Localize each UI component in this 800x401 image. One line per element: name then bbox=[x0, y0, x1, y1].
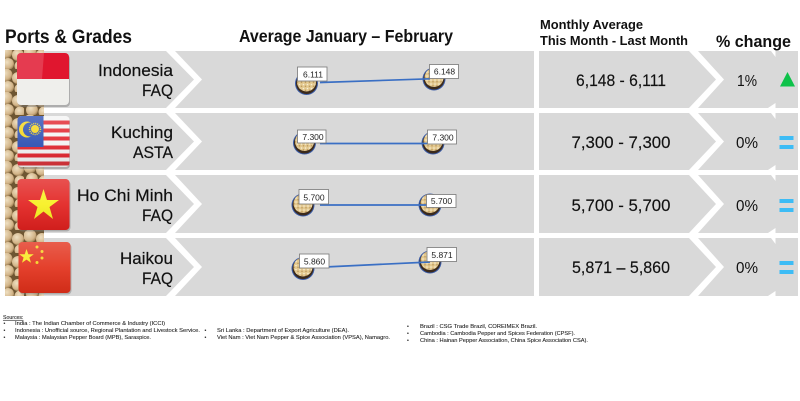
text: ho chi minh faq bbox=[77, 186, 173, 225]
title: monthly average: This Month - Last Month bbox=[540, 33, 688, 48]
text block: sources middle: Viet Nam : Viet Nam Pepper & Spice Association (VPSA), Namagro. bbox=[217, 335, 390, 341]
text: monthly values row 4: 5,871 – 5,860 bbox=[572, 258, 670, 277]
text block: sources right: Brazil : CSG Trade Brazil, COREIMEX Brazil. bbox=[420, 324, 537, 330]
title: percent change: % change bbox=[716, 32, 791, 51]
text block: sources middle: • bbox=[204, 335, 206, 341]
icon: flag of indonesia bbox=[17, 53, 70, 107]
icon: equals row 2 bbox=[780, 136, 794, 149]
chart: kuching line bbox=[293, 130, 456, 154]
text: haikou faq: FAQ bbox=[142, 269, 173, 288]
text: kuching asta: ASTA bbox=[133, 143, 174, 162]
text: monthly values row 3: 5,700 - 5,700 bbox=[572, 196, 670, 215]
text: haikou faq bbox=[120, 249, 173, 288]
text block: sources right: Cambodia : Cambodia Pepper and Spices Federation (CPSF). bbox=[420, 331, 575, 337]
text: percent row 2: 0% bbox=[736, 135, 758, 152]
text block: sources left bbox=[3, 315, 200, 341]
chart: kuching line: 7.300 bbox=[432, 132, 454, 142]
text block: sources left: India : The Indian Chamber of Commerce & Industry (ICCI) bbox=[15, 321, 165, 327]
chart: haikou line: 5.860 bbox=[304, 256, 325, 266]
text: monthly values row 2: 7,300 - 7,300 bbox=[572, 133, 670, 152]
chart: ho chi minh line bbox=[292, 190, 456, 216]
chart: ho chi minh line: 5.700 bbox=[431, 196, 452, 206]
text: percent row 1: 1% bbox=[737, 73, 757, 90]
icon: flag of malaysia bbox=[18, 116, 70, 169]
title: ports and grades: Ports & Grades bbox=[5, 27, 132, 48]
icon: flag of china bbox=[18, 242, 72, 294]
chart: indonesia line bbox=[295, 64, 458, 95]
text: kuching asta: Kuching bbox=[111, 123, 173, 142]
text: indonesia faq bbox=[98, 61, 174, 100]
text block: sources right: • bbox=[407, 324, 409, 330]
text: indonesia faq: Indonesia bbox=[98, 61, 174, 80]
panel: row 1 indonesia bbox=[44, 51, 798, 108]
text block: sources middle: • bbox=[204, 328, 206, 334]
chart: haikou line bbox=[292, 248, 456, 280]
text block: sources left: • bbox=[4, 328, 6, 334]
chart: ho chi minh line: 5.700 bbox=[303, 192, 325, 202]
panel: row 2 kuching bbox=[44, 113, 798, 170]
text: ho chi minh faq: FAQ bbox=[142, 206, 173, 225]
text block: sources right: • bbox=[407, 331, 409, 337]
chart: kuching line: 7.300 bbox=[302, 132, 324, 142]
text block: sources right bbox=[407, 324, 588, 344]
text: percent row 3: 0% bbox=[736, 198, 758, 215]
text block: sources middle bbox=[204, 328, 390, 341]
text: indonesia faq: FAQ bbox=[142, 81, 173, 100]
icon: equals row 3 bbox=[780, 199, 794, 212]
title: monthly average bbox=[540, 17, 688, 48]
title: average january february: Average January – February bbox=[239, 26, 453, 46]
text block: sources left: • bbox=[4, 335, 6, 341]
text block: sources left: Indonesia : Unofficial source, Regional Plantation and Livestock Service. bbox=[15, 328, 200, 334]
title: monthly average: Monthly Average bbox=[540, 17, 643, 32]
text: percent row 4: 0% bbox=[736, 260, 758, 277]
panel: pepper background strip bbox=[5, 50, 44, 296]
icon: flag of vietnam bbox=[18, 179, 70, 232]
text block: sources left: Malaysia : Malaysian Pepper Board (MPB), Saraspice. bbox=[15, 335, 151, 341]
text: kuching asta bbox=[111, 123, 174, 162]
icon: equals row 4 bbox=[780, 261, 794, 274]
text: ho chi minh faq: Ho Chi Minh bbox=[77, 186, 173, 205]
panel: row 4 haikou bbox=[44, 238, 798, 296]
text: haikou faq: Haikou bbox=[120, 249, 173, 268]
text: monthly values row 1: 6,148 - 6,111 bbox=[576, 71, 666, 90]
text block: sources middle: Sri Lanka : Department of Export Agriculture (DEA). bbox=[217, 328, 349, 334]
text block: sources left: Sources: bbox=[3, 315, 23, 321]
chart: indonesia line: 6.111 bbox=[303, 70, 323, 80]
text block: sources right: China : Hainan Pepper Association, China Spice Association CSA). bbox=[420, 338, 588, 344]
icon: green up triangle bbox=[780, 72, 795, 86]
text block: sources right: • bbox=[407, 338, 409, 344]
panel: row 3 ho chi minh bbox=[44, 175, 798, 233]
chart: indonesia line: 6.148 bbox=[434, 66, 455, 76]
text block: sources left: • bbox=[4, 321, 6, 327]
chart: haikou line: 5.871 bbox=[431, 250, 453, 260]
